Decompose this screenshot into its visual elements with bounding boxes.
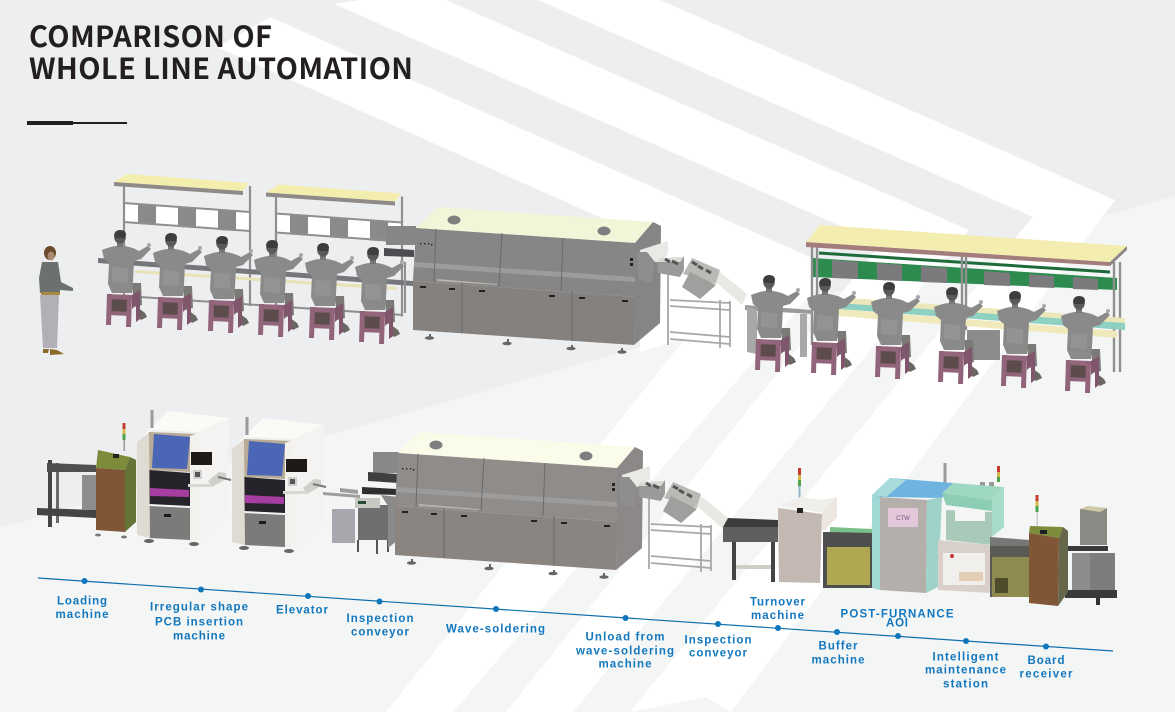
- post-furnace AOI: CTW: [896, 516, 910, 522]
- title: WHOLE LINE AUTOMATION: [29, 46, 413, 88]
- wave-soldering oven (manual line): [413, 207, 668, 354]
- label: intelligent maintenance station: Intelligent: [932, 652, 999, 664]
- board receiver cabinet and stacker: [1029, 495, 1117, 606]
- unload conveyor and stand (automated line): [638, 480, 728, 572]
- workers: repair row: [751, 275, 1110, 393]
- PCB insertion machine 1: [137, 410, 231, 546]
- label: loading machine: Loading: [57, 596, 107, 608]
- label: irregular shape PCB insertion machine: machine: [173, 630, 225, 642]
- background: lower light panel: [0, 196, 1175, 712]
- gold cabinet: [990, 546, 1029, 597]
- label: unload from wave-soldering machine: Unload from: [586, 632, 664, 644]
- label: turnover machine: Turnover: [750, 596, 806, 608]
- wave-soldering oven (automated line): [395, 432, 650, 579]
- person standing supervisor: [39, 246, 73, 355]
- label: wave-soldering: Wave-soldering: [446, 624, 545, 636]
- intelligent maintenance station: [938, 466, 1030, 593]
- repair line: frame with green panels: [806, 225, 1127, 372]
- workers: manual insertion row: [102, 230, 404, 344]
- label: unload from wave-soldering machine: wave-soldering: [575, 646, 674, 658]
- label: inspection conveyor 2: Inspection: [684, 634, 752, 646]
- turnover machine: [778, 468, 837, 583]
- label: unload from wave-soldering machine: machine: [598, 658, 652, 670]
- timeline station dots: [82, 578, 1049, 650]
- repair line: work table: [745, 298, 1125, 360]
- label: irregular shape PCB insertion machine: Irregular shape: [150, 602, 248, 614]
- label: intelligent maintenance station: station: [943, 678, 988, 690]
- label: buffer machine: machine: [812, 654, 864, 666]
- label: post-furnance AOI: POST-FURNANCE: [840, 608, 954, 620]
- post-furnace AOI: [872, 463, 953, 593]
- PCB insertion machine 2: [232, 417, 326, 553]
- loading machine: [37, 423, 136, 538]
- buffer machine: [823, 527, 872, 588]
- label: loading machine: machine: [56, 609, 108, 621]
- label: board receiver: Board: [1028, 655, 1064, 667]
- label: buffer machine: Buffer: [818, 640, 858, 652]
- inspection conveyor (automated line): [723, 518, 778, 582]
- label: irregular shape PCB insertion machine: PCB insertion: [155, 616, 243, 628]
- label: turnover machine: machine: [751, 610, 804, 622]
- elevator: [323, 452, 400, 554]
- timeline axis: [38, 578, 1113, 651]
- title: [29, 14, 413, 88]
- label: post-furnance AOI: AOI: [886, 618, 908, 630]
- title underline: [27, 121, 127, 125]
- label: board receiver: receiver: [1020, 668, 1073, 680]
- title: COMPARISON OF: [29, 14, 272, 56]
- background: white diagonal bands: [217, 0, 1115, 712]
- label: inspection conveyor: conveyor: [351, 626, 410, 638]
- label: inspection conveyor 2: conveyor: [689, 648, 748, 660]
- manual line: work table: [98, 226, 416, 315]
- unload conveyor and stand (manual line): [657, 256, 747, 348]
- label: elevator: Elevator: [276, 604, 329, 616]
- label: inspection conveyor: Inspection: [346, 613, 414, 625]
- manual line: overhead boards: [114, 174, 402, 316]
- label: intelligent maintenance station: maintenance: [925, 664, 1006, 676]
